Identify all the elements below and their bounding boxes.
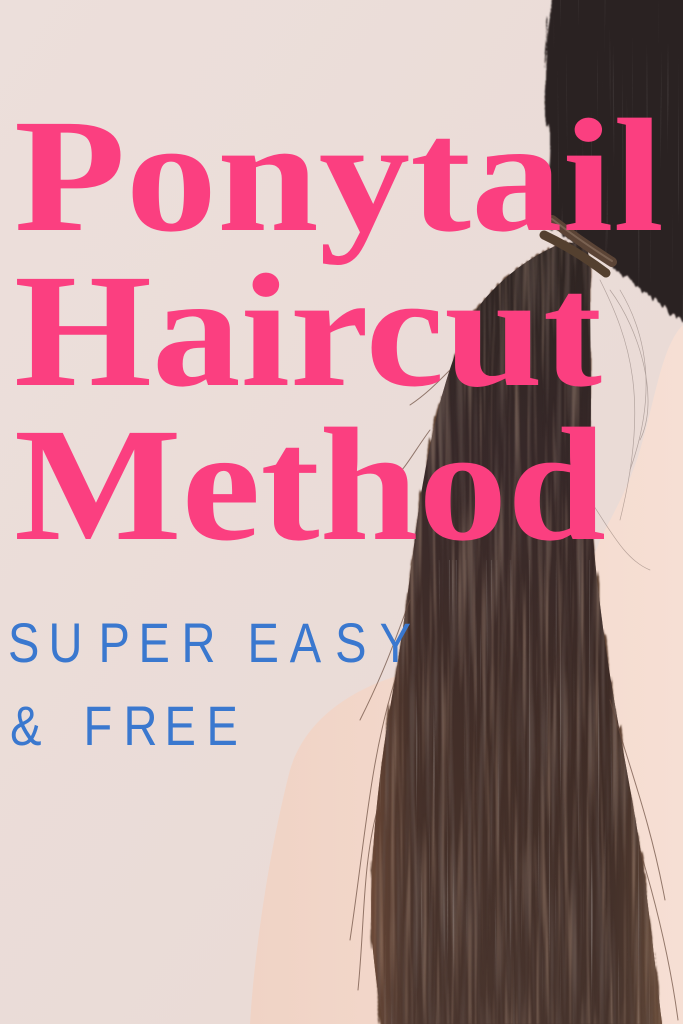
subtitle word: EASY: EASY — [247, 611, 411, 674]
hair elastic — [544, 219, 612, 273]
subtitle — [8, 611, 411, 757]
title line: Haircut: Haircut — [14, 242, 602, 421]
subtitle symbol: ampersand: & — [10, 694, 41, 757]
subtitle word: FREE: FREE — [83, 694, 238, 757]
title — [14, 87, 664, 575]
photo: woman's back with ponytail — [250, 0, 683, 1024]
ponytail — [360, 230, 670, 1024]
head hair — [544, 0, 683, 324]
subtitle word: SUPER: SUPER — [8, 611, 215, 674]
flyaway hair strands — [350, 280, 678, 1020]
neck and back skin — [250, 325, 683, 1024]
title line: Method: Method — [14, 396, 606, 575]
title line: Ponytail: Ponytail — [14, 87, 664, 266]
